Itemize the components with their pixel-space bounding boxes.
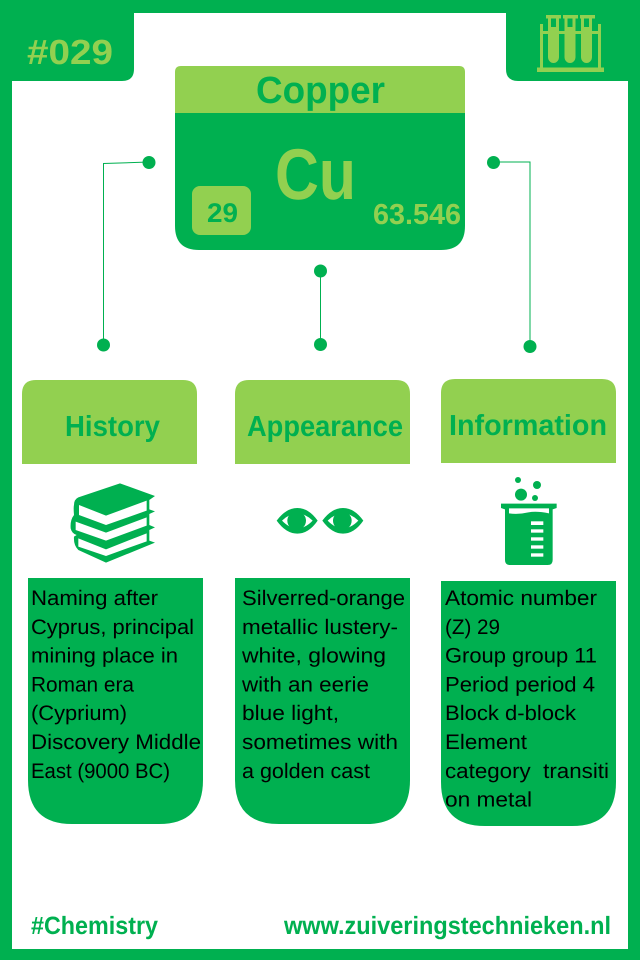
information text block: Block d-block bbox=[445, 702, 577, 725]
information text block: Atomic number bbox=[445, 587, 597, 610]
panel: number tab bbox=[0, 0, 134, 81]
icon: test tubes in rack bbox=[537, 15, 604, 72]
information heading: Information bbox=[449, 410, 607, 442]
atomic mass: 63.546 bbox=[373, 199, 461, 231]
history text block: Cyprus, principal bbox=[31, 616, 194, 639]
history heading: History bbox=[65, 411, 160, 443]
connector: middle bbox=[314, 264, 327, 351]
history heading bbox=[22, 380, 197, 464]
hashtag footer: #Chemistry bbox=[31, 912, 158, 940]
connector: left bbox=[97, 156, 156, 352]
icon: pair of eyes bbox=[277, 508, 363, 534]
panel: test tube tab bbox=[506, 0, 640, 81]
appearance heading: Appearance bbox=[247, 411, 403, 443]
icon: stack of books bbox=[71, 483, 155, 563]
information text block: Group group 11 bbox=[445, 644, 597, 668]
appearance text block: blue light, bbox=[242, 702, 339, 725]
icon: beaker with bubbles bbox=[501, 477, 557, 565]
information text block: Period period 4 bbox=[445, 674, 595, 696]
information text block: category transiti bbox=[445, 760, 609, 783]
element name: Copper bbox=[256, 70, 385, 112]
appearance text block: a golden cast bbox=[242, 760, 370, 783]
information text block: (Z) 29 bbox=[445, 616, 500, 639]
panel: element card bbox=[175, 66, 465, 250]
appearance text block: metallic lustery- bbox=[242, 616, 398, 639]
appearance text block bbox=[235, 578, 410, 824]
atomic number badge: 29 bbox=[207, 198, 238, 228]
panel: information bbox=[441, 379, 616, 826]
history text block: Naming after bbox=[31, 587, 158, 610]
connector: right bbox=[487, 156, 536, 353]
panel: appearance bbox=[235, 380, 410, 824]
information text block bbox=[441, 581, 616, 826]
element symbol: Cu bbox=[275, 135, 356, 215]
history text block bbox=[28, 578, 203, 824]
history text block: (Cyprium) bbox=[31, 702, 127, 725]
history text block: Roman era bbox=[31, 674, 134, 696]
history text block: East (9000 BC) bbox=[31, 760, 170, 783]
appearance text block: with an eerie bbox=[241, 674, 369, 696]
information text block: Element bbox=[445, 731, 527, 754]
information text block: on metal bbox=[445, 788, 532, 812]
appearance text block: Silverred-orange bbox=[242, 587, 405, 610]
history text block: mining place in bbox=[31, 644, 178, 668]
atomic number badge bbox=[192, 186, 251, 235]
panel: history bbox=[22, 380, 203, 824]
appearance text block: white, glowing bbox=[241, 644, 386, 668]
information heading bbox=[441, 379, 616, 463]
appearance text block: sometimes with bbox=[242, 731, 398, 754]
number label: #029 bbox=[27, 33, 113, 72]
history text block: Discovery Middle bbox=[31, 731, 201, 754]
website footer: www.zuiveringstechnieken.nl bbox=[283, 912, 611, 940]
card header bbox=[175, 66, 465, 113]
appearance heading bbox=[235, 380, 410, 464]
